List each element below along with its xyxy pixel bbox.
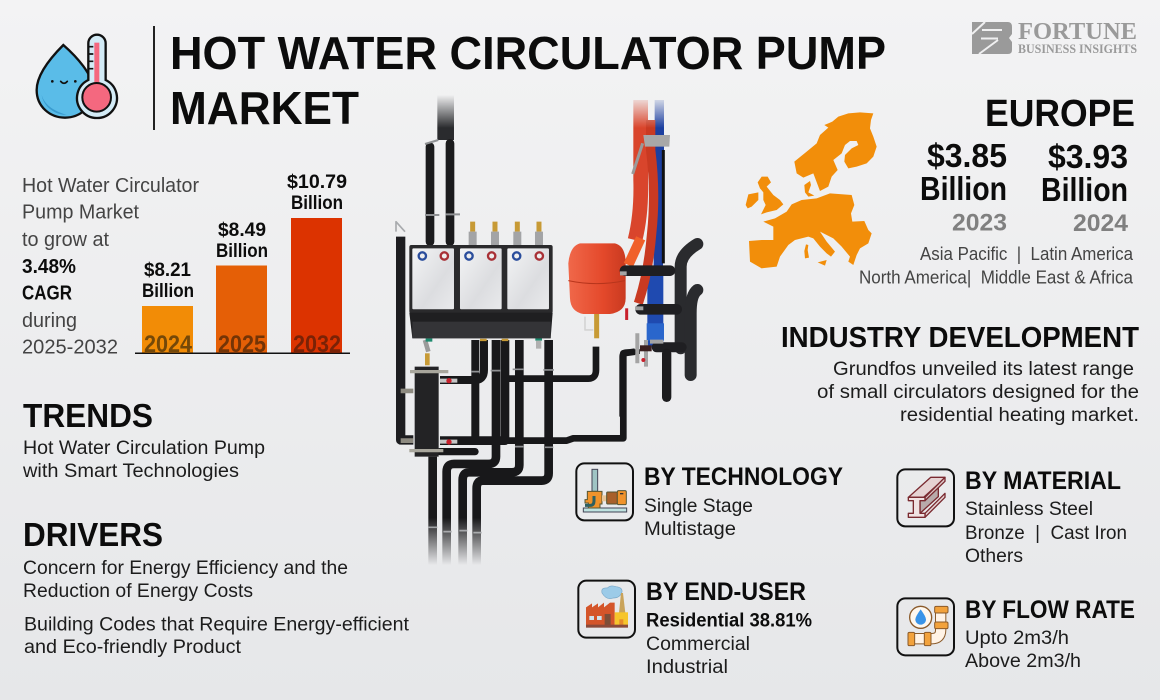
logo: Fortune Business Insights: FORTUNE xyxy=(1018,19,1137,45)
panel: by material: Others xyxy=(965,546,1023,567)
icon: water pipe xyxy=(897,598,954,655)
logo: Fortune Business Insights xyxy=(972,19,1137,56)
header divider xyxy=(153,26,155,130)
text: CAGR summary: 2025-2032 xyxy=(22,336,118,358)
tank xyxy=(568,243,626,314)
panel: by flow rate: BY FLOW RATE xyxy=(965,596,1135,624)
text: CAGR summary: to grow at xyxy=(22,229,109,251)
panel: by end-user: Commercial xyxy=(646,634,750,655)
panel: industry development: residential heating market. xyxy=(900,405,1139,426)
icon: water drop with thermometer xyxy=(37,35,117,118)
panel: trends: Hot Water Circulation Pump xyxy=(23,438,265,459)
text: CAGR summary: 3.48% xyxy=(22,256,76,278)
text: CAGR summary: Hot Water Circulator xyxy=(22,175,199,197)
panel: by flow rate: Upto 2m3/h xyxy=(965,628,1069,649)
panel: by material: Stainless Steel xyxy=(965,499,1093,520)
panel: by end-user: Industrial xyxy=(646,657,728,678)
bar chart xyxy=(135,171,350,358)
separator xyxy=(415,367,439,457)
text: CAGR summary xyxy=(22,175,199,358)
illustration: red and blue risers with elbows xyxy=(620,100,697,417)
text: other regions: Asia Pacific | Latin America xyxy=(920,243,1134,264)
lower pipes xyxy=(463,340,487,438)
stat: 2024 value: $3.93 xyxy=(1048,138,1128,175)
panel: market growth xyxy=(22,171,350,358)
panel: industry development xyxy=(781,322,1140,426)
panel: by end-user: Residential 38.81% xyxy=(646,610,812,632)
text: CAGR summary: Pump Market xyxy=(22,202,139,224)
bar chart: Billion xyxy=(216,240,268,262)
panel: drivers: DRIVERS xyxy=(23,516,163,553)
panel: drivers: Concern for Energy Efficiency and the xyxy=(23,558,348,579)
panel: industry development: INDUSTRY DEVELOPMENT xyxy=(781,322,1140,354)
text: CAGR summary: during xyxy=(22,310,77,332)
text: other regions: North America| Middle East & Africa xyxy=(859,266,1134,288)
icon: steel beam xyxy=(897,469,954,526)
panel: by material xyxy=(897,467,1127,567)
bar chart: Billion xyxy=(142,280,194,302)
text: other regions xyxy=(859,243,1134,288)
icon: pump xyxy=(576,463,633,520)
panel: trends: TRENDS xyxy=(23,397,153,434)
bar chart: 2032 xyxy=(293,331,341,358)
panel: drivers: Building Codes that Require Energy-efficient xyxy=(24,614,410,636)
panel: by technology: BY TECHNOLOGY xyxy=(644,463,843,491)
panel: by technology xyxy=(576,463,843,540)
stat: 2024 value xyxy=(1041,138,1129,237)
panel: by technology: Single Stage xyxy=(644,496,753,517)
bar chart: $10.79 xyxy=(287,171,347,193)
panel: industry development: of small circulators designed for the xyxy=(817,382,1139,403)
bar chart: Billion xyxy=(291,192,343,214)
title: HOT WATER CIRCULATOR PUMP xyxy=(170,27,886,79)
panel: trends xyxy=(22,397,265,482)
panel: by flow rate: Above 2m3/h xyxy=(965,651,1081,672)
stat: 2024 value: 2024 xyxy=(1073,210,1129,237)
text: CAGR summary: CAGR xyxy=(22,282,72,304)
stat: 2023 value: 2023 xyxy=(952,210,1007,236)
panel: drivers: Reduction of Energy Costs xyxy=(23,581,253,602)
stat: 2023 value: Billion xyxy=(920,170,1007,207)
stat: 2023 value xyxy=(920,137,1007,236)
panel: by technology: Multistage xyxy=(644,519,736,540)
illustration: pump plumbing assembly xyxy=(396,90,697,590)
panel: by end-user xyxy=(578,578,812,678)
stat: 2023 value: $3.85 xyxy=(927,137,1007,174)
map: Europe xyxy=(746,112,877,268)
panel: trends: with Smart Technologies xyxy=(22,461,239,482)
icon: factory xyxy=(578,581,635,638)
panel: by material: Bronze | Cast Iron xyxy=(965,523,1127,544)
stat: 2024 value: Billion xyxy=(1041,171,1128,208)
logo: Fortune Business Insights: BUSINESS INSIGHTS xyxy=(1018,42,1137,56)
panel: industry development: Grundfos unveiled its latest range xyxy=(833,359,1134,380)
title: MARKET xyxy=(170,82,359,134)
panel: Europe regional xyxy=(746,93,1135,288)
title xyxy=(170,27,886,134)
panel: by end-user: BY END-USER xyxy=(646,578,806,606)
panel: by material: BY MATERIAL xyxy=(965,467,1121,495)
heading: Europe: EUROPE xyxy=(985,93,1135,135)
bar chart: $8.21 xyxy=(144,259,191,281)
valves xyxy=(473,222,539,232)
bar chart: 2024 xyxy=(144,331,193,358)
housing and manifold xyxy=(409,245,553,313)
bar chart: 2025 xyxy=(218,331,266,358)
panel: drivers xyxy=(23,516,410,658)
panel: drivers: and Eco-friendly Product xyxy=(24,637,242,658)
bar chart: $8.49 xyxy=(218,219,266,241)
panel: by flow rate xyxy=(897,596,1135,672)
